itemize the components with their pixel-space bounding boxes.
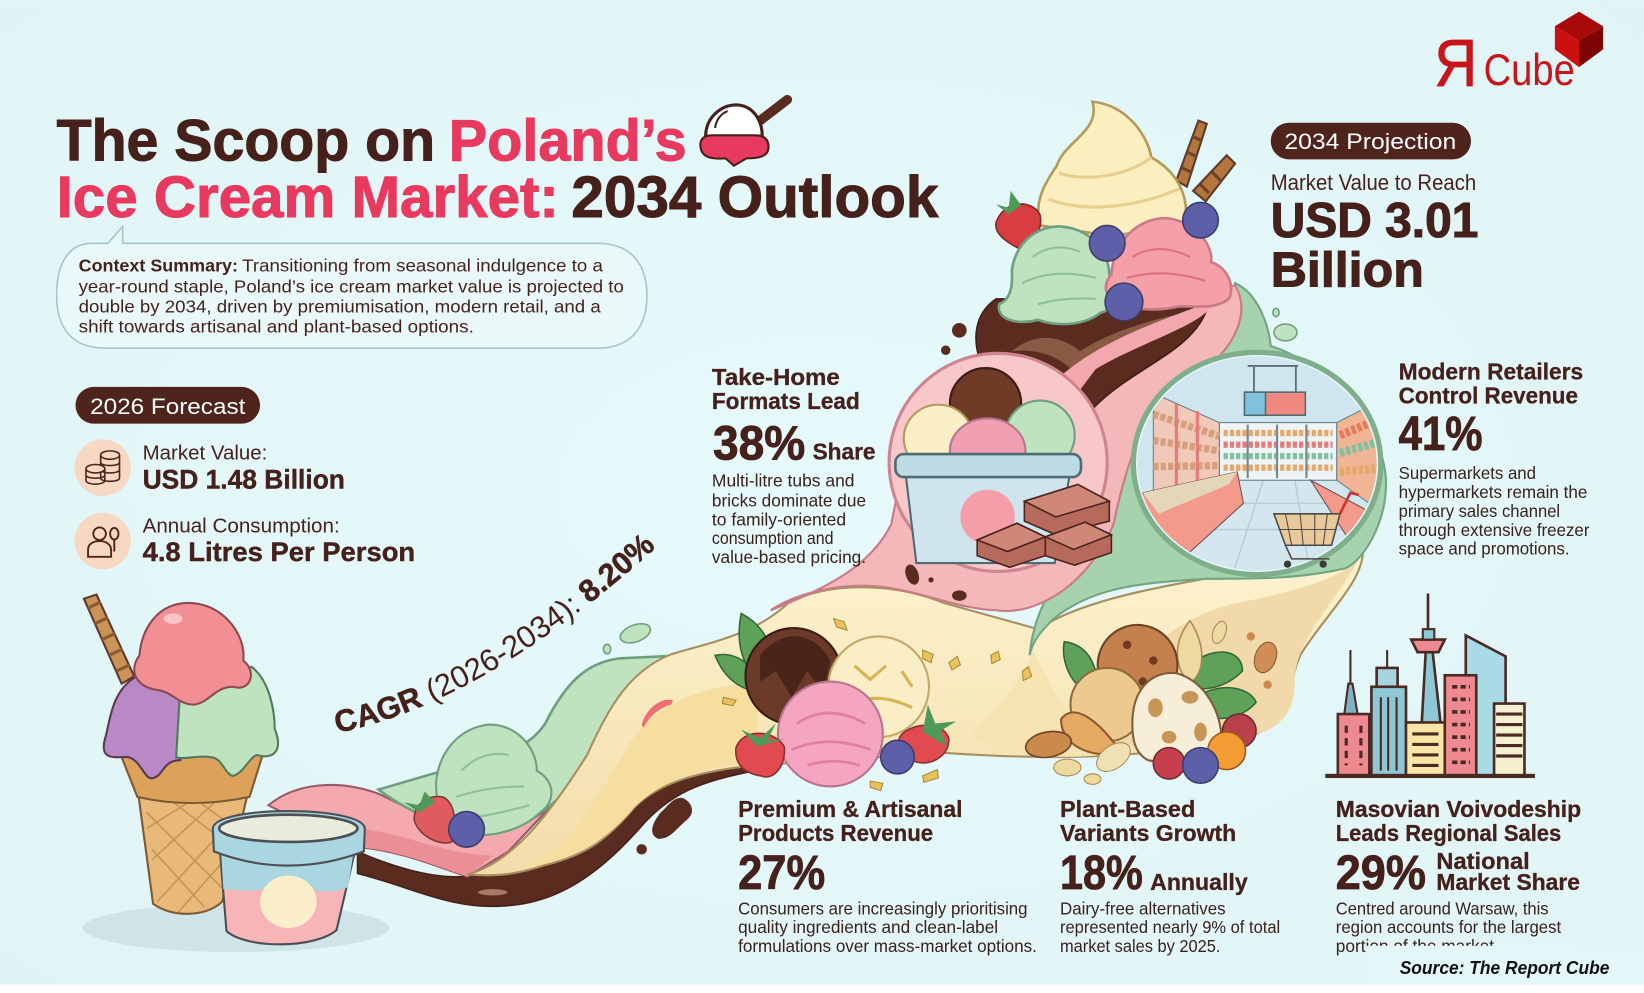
logo: RCube: Cube [1484,46,1575,95]
panel: take-home formats: Share [813,438,876,464]
title: Poland’s [449,108,687,173]
badge: 2026 forecast [75,387,260,424]
panel: premium and artisanal: 27% [738,846,825,900]
sub-element: upper pink ribbon [771,285,1241,611]
logo: RCube: Я [1434,26,1477,101]
stat: annual consumption [143,515,415,567]
panel: take-home formats: consumption and [712,528,834,548]
stat: market value: USD 1.48 Billion [143,464,345,495]
panel: modern retailers: hypermarkets remain the [1399,482,1587,502]
ice cream flow ribbon [268,283,1386,906]
panel: 2034 projection [1271,123,1478,297]
title [57,108,939,230]
callout: context summary [57,227,647,348]
sub-element: chocolate swirl [976,299,1208,409]
panel: modern retailers: primary sales channel [1399,501,1560,521]
ice cream tub [213,811,365,944]
panel: premium and artisanal: Products Revenue [738,820,933,846]
panel: plant-based: market sales by 2025. [1060,936,1220,956]
stat: annual consumption: 4.8 Litres Per Person [143,536,415,567]
panel: masovian voivodeship: 29% [1336,846,1426,900]
icon: coins [74,439,131,496]
panel: masovian voivodeship: Leads Regional Sales [1336,820,1561,846]
panel: plant-based [1060,796,1280,956]
panel: take-home formats [712,364,876,567]
panel: masovian voivodeship: Market Share [1436,869,1580,895]
panel: 2034 projection: Market Value to Reach [1271,170,1476,195]
logo: RCube [1434,12,1603,101]
panel: 2034 projection: USD 3.01 [1271,193,1478,248]
callout: context summary: year-round staple, Poland’s ice cream market value is projected to [79,277,624,297]
panel: take-home formats: Formats Lead [712,388,860,414]
panel: take-home formats: to family-oriented [712,509,846,529]
icon: ice cream scoop [700,100,787,166]
panel: modern retailers: space and promotions. [1399,539,1570,559]
callout: context summary: shift towards artisanal and plant-based options. [79,316,474,336]
source note: Source: The Report Cube [1400,957,1609,978]
stat: annual consumption: Annual Consumption: [143,515,340,538]
panel: 2034 projection: 2034 Projection [1284,129,1456,154]
title: The Scoop on [57,108,435,173]
panel: take-home formats: bricks dominate due [712,490,866,510]
panel: plant-based: 18% [1060,846,1143,900]
panel: premium and artisanal: formulations over mass-market options. [738,936,1037,956]
stat: market value [143,441,345,495]
panel: masovian voivodeship: Centred around Warsaw, this [1336,898,1549,918]
badge: 2026 forecast: 2026 Forecast [90,394,245,419]
drop: chocolate splashes [636,323,967,855]
panel: plant-based: Dairy-free alternatives [1060,898,1226,918]
callout: context summary: Context Summary: [79,256,238,276]
panel: modern retailers [1399,359,1590,559]
source note [1366,946,1644,985]
panel: 2026 forecast [74,387,415,569]
icon: person and cone [74,513,131,569]
premium scoops illustration [642,613,1032,791]
panel: masovian voivodeship [1336,796,1581,956]
panel: modern retailers: through extensive freezer [1399,520,1590,540]
panel: premium and artisanal: Consumers are increasingly prioritising [738,898,1027,918]
panel: modern retailers: Control Revenue [1399,383,1578,409]
panel: plant-based: Variants Growth [1060,820,1236,846]
city skyline [1325,593,1535,778]
panel: take-home formats: value-based pricing. [712,547,866,567]
drop: green splashes [603,308,1297,654]
panel: plant-based: Plant-Based [1060,796,1195,822]
panel: modern retailers: 41% [1399,407,1483,461]
green scoop with berries [404,725,551,847]
circle: take-home tub and bricks [889,353,1111,571]
panel: take-home formats: Multi-litre tubs and [712,471,855,491]
panel: premium and artisanal [738,796,1037,956]
panel: modern retailers: Modern Retailers [1399,359,1583,385]
callout: context summary: Transitioning from seasonal indulgence to a [242,256,603,276]
top swirl sundae [996,102,1235,324]
title: 2034 Outlook [571,165,939,230]
panel: plant-based: Annually [1150,869,1248,895]
title: Ice Cream Market: [57,165,559,230]
CAGR label: CAGR (2026-2034): 8.20% [335,534,654,732]
plant-based scoops illustration [1024,619,1281,784]
stat: market value: Market Value: [143,441,267,464]
panel: masovian voivodeship: National [1436,848,1530,874]
circle: supermarket store [1132,352,1394,587]
panel: masovian voivodeship: portion of the market [1336,936,1494,956]
sub-element: green ribbon [1030,283,1386,655]
panel: take-home formats: Take-Home [712,364,840,390]
panel: 2034 projection: Billion [1271,242,1424,297]
ice cream cone [83,595,389,952]
panel: plant-based: represented nearly 9% of total [1060,917,1280,937]
panel: premium and artisanal: quality ingredients and clean-label [738,917,998,937]
panel: masovian voivodeship: region accounts for the largest [1336,917,1561,937]
panel: premium and artisanal: Premium & Artisanal [738,796,962,822]
panel: modern retailers: Supermarkets and [1399,463,1536,483]
panel: take-home formats: 38% [713,416,805,470]
panel: masovian voivodeship: Masovian Voivodeship [1336,796,1581,822]
callout: context summary: double by 2034, driven by premiumisation, modern retail, and a [79,296,601,316]
